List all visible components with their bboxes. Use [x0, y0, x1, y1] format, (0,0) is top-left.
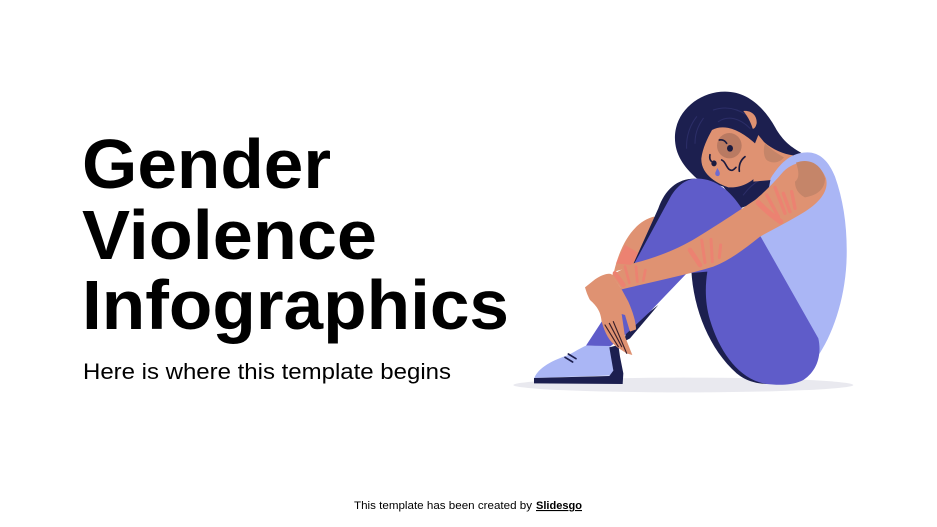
finger lines	[605, 322, 627, 353]
shoe sole	[534, 345, 623, 384]
black eye bruise	[717, 133, 742, 158]
thigh dark edge	[691, 267, 768, 384]
far arm mark	[616, 245, 639, 265]
neck	[753, 135, 793, 182]
title: Violence	[82, 196, 377, 274]
footer credit: Slidesgo	[536, 500, 582, 512]
shoe	[534, 346, 614, 378]
ground shadow	[513, 378, 853, 392]
hand marks on upper arm	[758, 187, 795, 222]
hand marks on wrist	[615, 267, 645, 285]
shoe laces	[565, 354, 576, 362]
shoulder bruise	[795, 161, 825, 197]
thigh and shin	[586, 179, 820, 385]
hand marks on forearm	[690, 239, 721, 265]
arm	[612, 162, 827, 289]
subtitle: Here is where this template begins	[83, 359, 451, 384]
hair back	[675, 92, 803, 208]
title	[82, 125, 509, 344]
ear	[743, 111, 757, 129]
title: Gender	[82, 125, 331, 203]
shin dark edge	[633, 179, 697, 265]
eyes and mouth	[710, 140, 745, 171]
footer credit: This template has been created by	[354, 500, 533, 512]
illustration: seated woman	[513, 92, 853, 392]
shirt	[760, 152, 847, 354]
hand	[585, 274, 636, 355]
face	[701, 127, 764, 187]
ankle dark edge	[624, 305, 658, 342]
hair strands	[687, 108, 760, 195]
far arm behind leg	[614, 217, 658, 272]
title: Infographics	[82, 266, 509, 344]
neck bruise	[764, 143, 784, 162]
tear	[715, 168, 720, 176]
